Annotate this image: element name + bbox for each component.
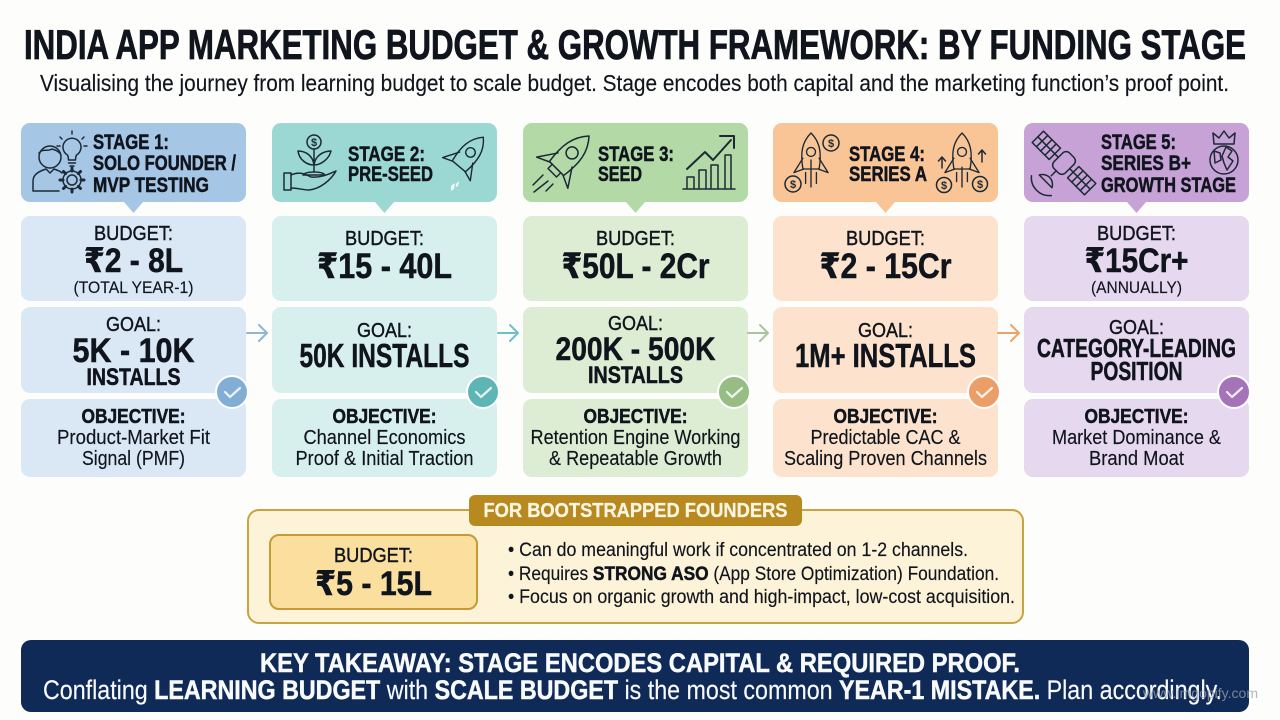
bootstrapped bullet list [508,540,1015,608]
icon: stage 2 check badge [467,376,499,408]
icon: rocket with rising coins [936,133,988,192]
stage 3 objective [523,399,748,477]
icon: stage 4 check badge [968,376,1000,408]
arrow: stage 3 to stage 4 [748,325,768,341]
stage 1 objective [21,399,246,477]
stage 1 goal: 5K - 10K [72,332,195,370]
icon: stage 1 check badge [216,376,248,408]
icon: rocket [443,126,497,191]
stage 5 budget: (ANNUALLY) [1091,278,1182,297]
stage 1 budget [21,216,246,301]
stage 1 objective: Signal (PMF) [82,448,185,470]
stage 2 goal [272,307,497,393]
stage 4 objective: Scaling Proven Channels [784,448,987,470]
stage 5 budget: ₹15Cr+ [1084,242,1188,280]
arrow: stage 1 to stage 2 [247,325,267,341]
stage 5 goal: POSITION [1090,356,1182,386]
stage 2 budget: BUDGET: [345,228,424,250]
stage 5 header: STAGE 5: [1101,131,1176,154]
arrow: stage 2 to stage 3 [498,325,518,341]
stage 5 objective: OBJECTIVE: [1084,406,1188,428]
icon: rocket launch [533,120,605,192]
stage 3 objective: OBJECTIVE: [584,406,688,428]
bootstrapped budget box [270,535,477,609]
watermark: www.imgopify.com [1142,686,1258,701]
stage 2 budget [272,216,497,301]
stage 4 goal [773,307,998,393]
icon: rocket with rising coins: $ [977,179,983,191]
key takeaway banner [21,640,1249,712]
key takeaway banner: KEY TAKEAWAY: STAGE ENCODES CAPITAL & REQUIRED PROOF. [260,648,1020,678]
stage 3 goal: INSTALLS [588,362,683,389]
stage 2 objective: Proof & Initial Traction [296,448,474,470]
panel: stage 1 column [21,123,248,477]
stage 1 goal: INSTALLS [86,364,180,391]
stage 5 budget [1024,216,1249,301]
stage 4 objective [773,399,998,477]
icon: satellite [1010,129,1098,217]
icon: rocket with coins [785,133,839,192]
bootstrapped bullet list: • Can do meaningful work if concentrated on 1-2 channels. [508,540,968,561]
stage 4 header: SERIES A [849,163,927,186]
stage 3 budget [523,216,748,301]
stage 4 goal: GOAL: [858,320,913,342]
panel: stage 3 column [523,120,750,477]
stage 1 objective: OBJECTIVE: [82,406,186,428]
stage 1 budget: (TOTAL YEAR-1) [74,278,194,297]
stage 4 objective: OBJECTIVE: [834,406,938,428]
stage 1 header: STAGE 1: [93,131,169,154]
icon: rocket with coins: $ [790,179,796,191]
key takeaway banner: Conflating LEARNING BUDGET with SCALE BUDGET is the most common YEAR-1 MISTAKE. Plan accordingly. [43,675,1222,705]
icon: stage 3 check badge [718,376,750,408]
stage 1 goal: GOAL: [106,314,161,336]
bootstrapped bullet list: • Requires STRONG ASO (App Store Optimization) Foundation. [508,564,999,585]
panel: stage 4 column [773,123,1000,477]
stage 2 objective: OBJECTIVE: [332,406,436,428]
stage 2 goal: 50K INSTALLS [300,337,470,374]
bootstrapped budget box: BUDGET: [334,545,413,567]
bootstrapped heading tab: FOR BOOTSTRAPPED FOUNDERS [484,500,788,522]
stage 4 objective: Predictable CAC & [810,427,961,449]
stage 3 goal: 200K - 500K [556,331,716,367]
icon: stage 5 check badge [1218,376,1250,408]
stage 3 header [523,120,748,213]
icon: rocket with coins: $ [828,138,834,150]
stage 4 budget [773,216,998,301]
panel: stage 5 column [1010,123,1250,477]
stage 5 header [1010,123,1249,217]
stage 5 objective: Market Dominance & [1052,427,1222,449]
stage 1 header: SOLO FOUNDER / [93,152,236,175]
stage 2 objective [272,399,497,477]
stage 3 goal: GOAL: [608,313,663,335]
stage 4 goal: 1M+ INSTALLS [795,337,976,374]
bootstrapped bullet list: • Focus on organic growth and high-impact, low-cost acquisition. [508,587,1015,608]
stage 3 goal [523,307,748,393]
stage 3 header: SEED [598,163,642,186]
stage 3 header: STAGE 3: [598,143,674,166]
stage 5 goal: GOAL: [1109,317,1164,339]
stage 3 budget: ₹50L - 2Cr [562,247,710,286]
stage 3 objective: & Repeatable Growth [549,448,722,470]
stage 5 header: SERIES B+ [1101,152,1191,175]
panel: for bootstrapped founders [248,495,1023,623]
stage 3 budget: BUDGET: [596,228,675,250]
stage 4 header [773,123,998,213]
stage 1 budget: ₹2 - 8L [84,242,183,280]
stage 2 header [272,123,497,213]
stage 5 objective: Brand Moat [1089,448,1184,470]
stage 2 budget: ₹15 - 40L [317,247,452,286]
stage 5 objective [1024,399,1249,477]
stage 3 objective: Retention Engine Working [530,427,740,449]
bootstrapped budget box: ₹5 - 15L [315,565,432,603]
icon: rocket with rising coins: $ [941,180,947,192]
bootstrapped heading tab [469,495,802,526]
stage 2 header: PRE-SEED [348,163,433,186]
stage 5 header: GROWTH STAGE [1101,174,1236,197]
stage 4 budget: BUDGET: [846,228,925,250]
stage 4 budget: ₹2 - 15Cr [820,247,952,286]
icon: founder with bulb and gear [33,131,87,192]
stage 1 budget: BUDGET: [94,223,173,245]
panel: stage 2 column [272,123,499,477]
stage 5 budget: BUDGET: [1097,223,1176,245]
stage 1 header: MVP TESTING [93,174,209,197]
stage 2 header: STAGE 2: [348,143,425,166]
stage 1 goal [21,307,246,393]
icon: crowned globe [1210,131,1238,174]
stage 2 objective: Channel Economics [304,427,466,449]
icon: hand holding plant [284,135,336,190]
stage 2 goal: GOAL: [357,320,412,342]
stage 5 goal [1024,307,1249,393]
stage 1 header [21,123,246,213]
stage 1 objective: Product-Market Fit [57,427,210,449]
icon: growth chart [683,136,735,189]
arrow: stage 4 to stage 5 [998,325,1019,341]
icon: hand holding plant: $ [311,137,317,149]
stage 4 header: STAGE 4: [849,143,925,166]
